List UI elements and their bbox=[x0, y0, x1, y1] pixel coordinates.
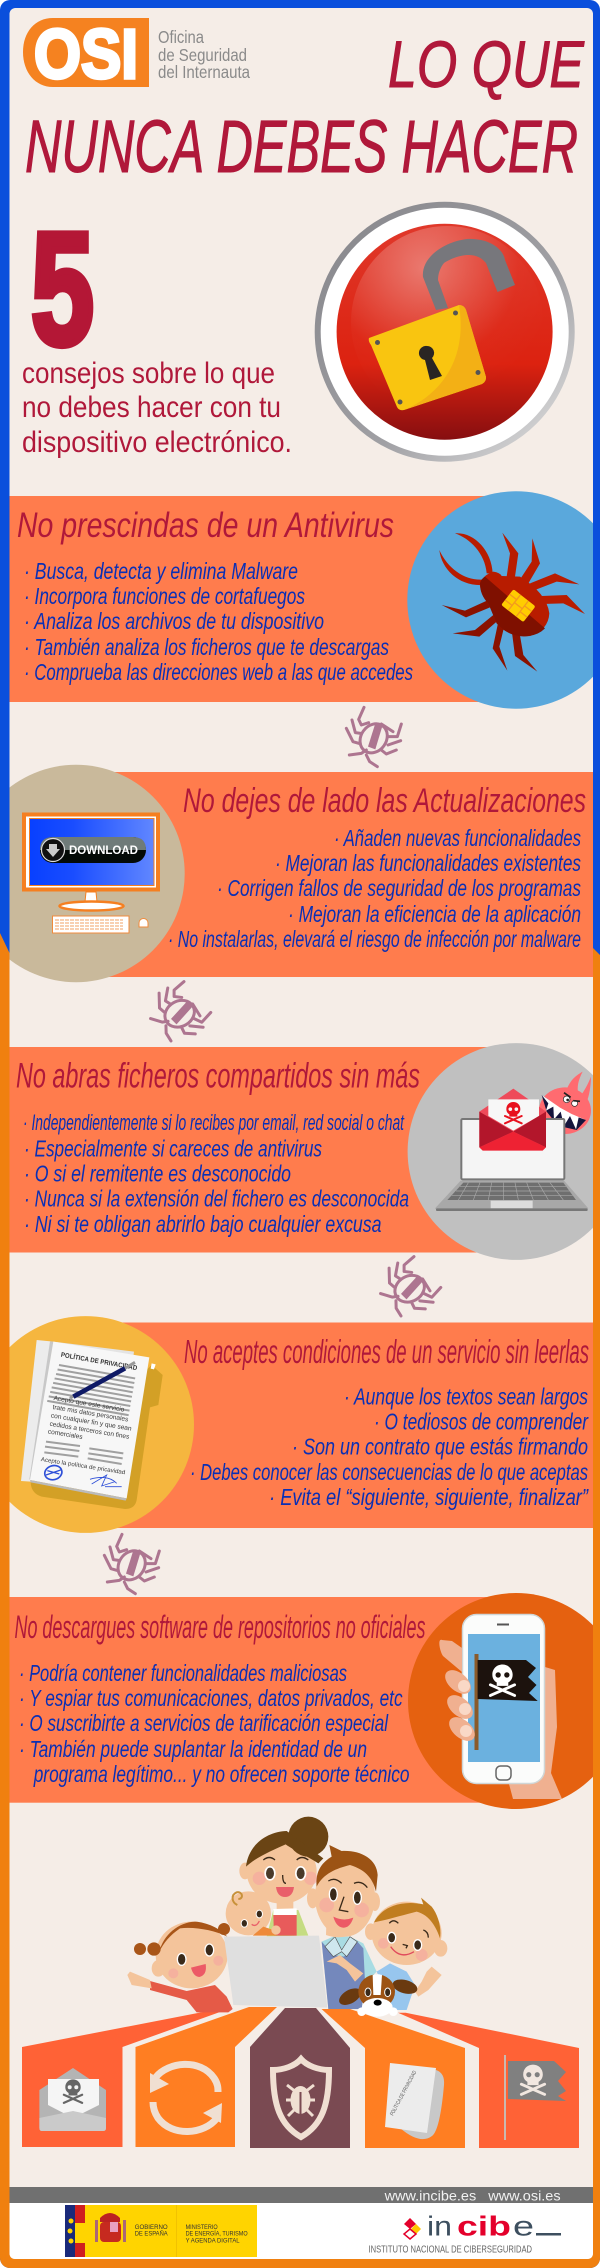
father bbox=[307, 1845, 380, 2009]
intro text: dispositivo electrónico. bbox=[22, 426, 292, 459]
icon: laptop with malicious email on gray circle bbox=[408, 1043, 600, 1260]
logo: gobierno de españa: DE ENERGÍA, TURISMO bbox=[186, 2229, 248, 2238]
icon: small bug 2 bbox=[143, 974, 218, 1051]
bullet list: · O si el remitente es desconocido bbox=[24, 1160, 291, 1186]
logo: incibe: INSTITUTO NACIONAL DE CIBERSEGURIDAD bbox=[368, 2245, 532, 2256]
bullet list bbox=[19, 1660, 410, 1787]
mother bbox=[239, 1817, 328, 1937]
icon: monitor with download button on beige circle: DOWNLOAD bbox=[69, 843, 138, 857]
icon: privacy policy document on yellow circle: con cualquier fin y que sean bbox=[50, 1412, 132, 1433]
bullet list: · Podría contener funcionalidades maliciosas bbox=[19, 1660, 347, 1686]
icon: privacy policy document on yellow circle: comerciales bbox=[47, 1428, 84, 1441]
logo: gobierno de españa: Y AGENDA DIGITAL bbox=[186, 2238, 240, 2244]
title bbox=[25, 27, 585, 188]
panel: no aceptes condiciones bbox=[0, 1316, 593, 1533]
bullet list bbox=[24, 558, 413, 685]
logo: gobierno de españa bbox=[65, 2205, 257, 2257]
bullet list: · Busca, detecta y elimina Malware bbox=[24, 558, 298, 584]
dog bbox=[336, 1974, 419, 2017]
icon: privacy policy document on yellow circle: POLÍTICA DE PRIVACIDAD bbox=[60, 1350, 138, 1372]
bullet list: · Nunca si la extensión del fichero es desconocida bbox=[24, 1185, 409, 1211]
tab 4: policy document: POLÍTICA DE PRIVACIDAD bbox=[389, 2069, 418, 2117]
icon: small bug 1 bbox=[346, 707, 401, 767]
tab 2: refresh bbox=[136, 2007, 277, 2147]
bullet list: · También puede suplantar la identidad de un bbox=[19, 1736, 367, 1762]
logo: OSI: del Internauta bbox=[158, 62, 250, 82]
intro text bbox=[22, 357, 292, 459]
bullet list: · Especialmente si careces de antivirus bbox=[24, 1135, 322, 1161]
illustration: family with laptop bbox=[127, 1817, 447, 2017]
bullet list: programa legítimo... y no ofrecen soporte técnico bbox=[33, 1761, 410, 1787]
icon: small bug 4 bbox=[104, 1534, 159, 1594]
tabs: five coloured tabs with icons bbox=[22, 2007, 579, 2148]
logo: gobierno de españa: MINISTERIO bbox=[186, 2224, 218, 2231]
logo: gobierno de españa: DE ESPAÑA bbox=[135, 2229, 168, 2238]
intro text: no debes hacer con tu bbox=[22, 391, 281, 424]
icon: privacy policy document on yellow circle bbox=[0, 1316, 194, 1533]
bullet list: · Comprueba las direcciones web a las que accedes bbox=[24, 659, 413, 685]
bullet list: · Y espiar tus comunicaciones, datos privados, etc bbox=[19, 1685, 403, 1711]
intro text: consejos sobre lo que bbox=[22, 357, 275, 390]
footer bar with urls bbox=[10, 2187, 593, 2204]
tab 5: pirate flag bbox=[398, 2013, 579, 2148]
icon: small bug 3 bbox=[373, 1249, 448, 1326]
bullet list bbox=[23, 1110, 409, 1237]
logo: OSI: de Seguridad bbox=[158, 45, 247, 65]
footer white strip bbox=[10, 2203, 593, 2259]
panel: no prescindas de un antivirus bbox=[10, 491, 600, 709]
icon: spider on blue circle bbox=[407, 491, 600, 709]
icon: phone with pirate flag on orange circle bbox=[408, 1593, 600, 1809]
tab 3: shield with bug bbox=[250, 2008, 350, 2148]
heading: No prescindas de un Antivirus bbox=[17, 506, 394, 545]
logo: incibe: cib bbox=[457, 2211, 511, 2242]
bullet list: · Ni si te obligan abrirlo bajo cualquier excusa bbox=[24, 1211, 382, 1237]
tab 1: email bbox=[22, 2012, 220, 2147]
icon: privacy policy document on yellow circle: Acepto que este servicio bbox=[53, 1395, 125, 1414]
bullet list bbox=[190, 1384, 589, 1510]
big number 5: 5 bbox=[31, 199, 94, 378]
panel: no dejes de lado las actualizaciones bbox=[0, 765, 593, 982]
icon: privacy policy document on yellow circle: cedidos a terceros con fines bbox=[49, 1421, 130, 1441]
bullet list: · Analiza los archivos de tu dispositivo bbox=[24, 608, 324, 634]
logo: OSI: Oficina bbox=[158, 27, 204, 47]
tab 4: policy document bbox=[322, 2009, 465, 2148]
logo: OSI: OSI bbox=[34, 15, 138, 93]
logo: incibe: in bbox=[427, 2211, 452, 2242]
baby bbox=[226, 1891, 281, 1936]
footer bar with urls: www.incibe.es www.osi.es bbox=[384, 2188, 561, 2204]
bullet list bbox=[168, 825, 581, 952]
icon: monitor with download button on beige circle bbox=[0, 765, 185, 982]
laptop bbox=[224, 1936, 327, 2008]
panel: no descargues software bbox=[10, 1593, 600, 1809]
icon: open padlock button bbox=[318, 205, 572, 459]
bullet list: · También analiza los ficheros que te descargas bbox=[24, 634, 389, 660]
icon: privacy policy document on yellow circle: trate mis datos personales bbox=[52, 1404, 129, 1424]
panel: no abras ficheros compartidos bbox=[10, 1043, 600, 1260]
logo: incibe bbox=[368, 2211, 561, 2256]
icon: privacy policy document on yellow circle: Acepto la política de pricavidad bbox=[40, 1457, 126, 1476]
logo: gobierno de españa: GOBIERNO bbox=[135, 2224, 168, 2231]
logo: incibe: e bbox=[513, 2211, 534, 2242]
boy bbox=[365, 1898, 447, 2010]
girl bbox=[127, 1922, 233, 2012]
bullet list: · Incorpora funciones de cortafuegos bbox=[24, 583, 305, 609]
logo: OSI bbox=[23, 15, 250, 93]
bullet list: · O suscribirte a servicios de tarificación especial bbox=[19, 1710, 389, 1736]
